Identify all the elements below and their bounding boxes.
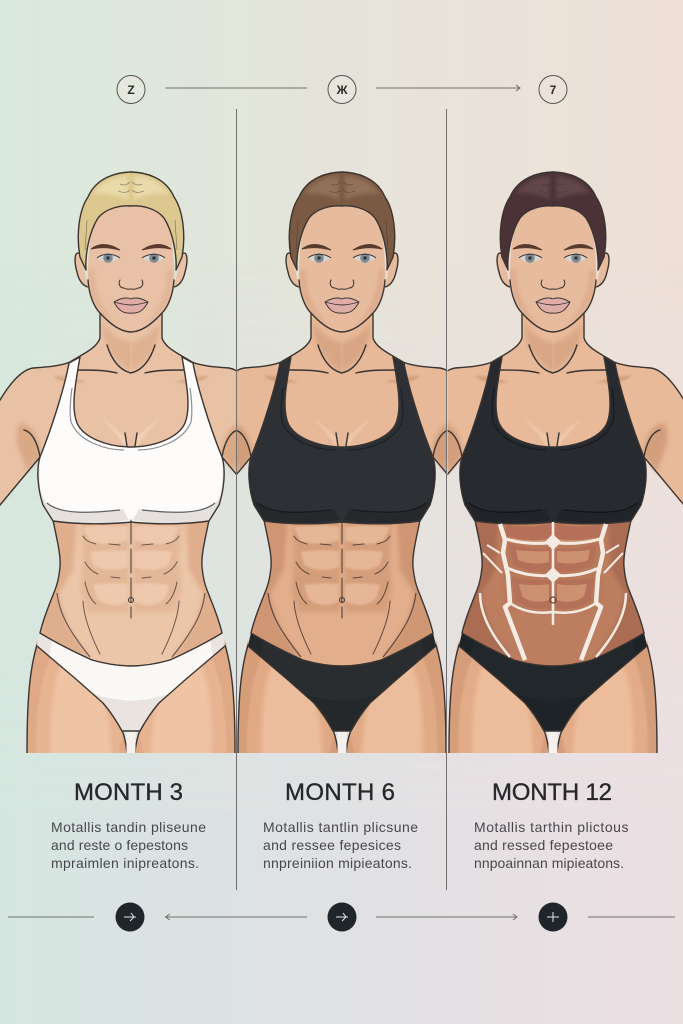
step marker: zhe — [328, 76, 356, 104]
timeline: top steps — [117, 76, 567, 104]
description: month 12: nnpoainnan mipieatons. — [474, 855, 624, 871]
arrow: to last step — [376, 85, 520, 91]
description: month 12: and ressed fepestoee — [474, 837, 613, 853]
description: month 3: Motallis tandin pliseune — [51, 819, 206, 835]
arrow: on to month 12 — [376, 914, 517, 920]
step marker: seven — [539, 76, 567, 104]
description: month 12 — [474, 819, 628, 871]
heading: month 6: MONTH 6 — [285, 779, 395, 806]
heading: month 3: MONTH 3 — [74, 779, 183, 806]
description: month 6: nnpreiniion mipieatons. — [263, 855, 412, 871]
figure: month 12 — [378, 172, 683, 760]
column: month 6 text — [263, 779, 418, 871]
description: month 3: and reste o fepestons — [51, 837, 188, 853]
icon: bottom marker two — [328, 902, 356, 932]
step marker: seven: 7 — [550, 83, 557, 97]
dividers — [236, 109, 446, 890]
description: month 6: and ressee fepesices — [263, 837, 401, 853]
description: month 12: Motallis tarthin plictous — [474, 819, 628, 835]
description: month 6 — [263, 819, 418, 871]
column: month 12 text — [474, 779, 628, 871]
step marker: zhe: Ж — [336, 83, 348, 97]
description: month 6: Motallis tantlin plicsune — [263, 819, 418, 835]
description: month 3: mpraimlen inipreatons. — [51, 855, 199, 871]
step marker: z: Z — [127, 83, 135, 97]
figure: month 6 — [167, 172, 517, 760]
column: month 3 text — [51, 779, 206, 871]
description: month 3 — [51, 819, 206, 871]
icon: bottom marker three — [538, 902, 568, 932]
figure: month 3 — [0, 172, 306, 760]
step marker: z — [117, 76, 145, 104]
arrow: back to month 3 — [166, 914, 307, 920]
icon: bottom marker one — [116, 902, 144, 932]
heading: month 12: MONTH 12 — [492, 779, 612, 806]
timeline: bottom steps — [8, 902, 675, 932]
